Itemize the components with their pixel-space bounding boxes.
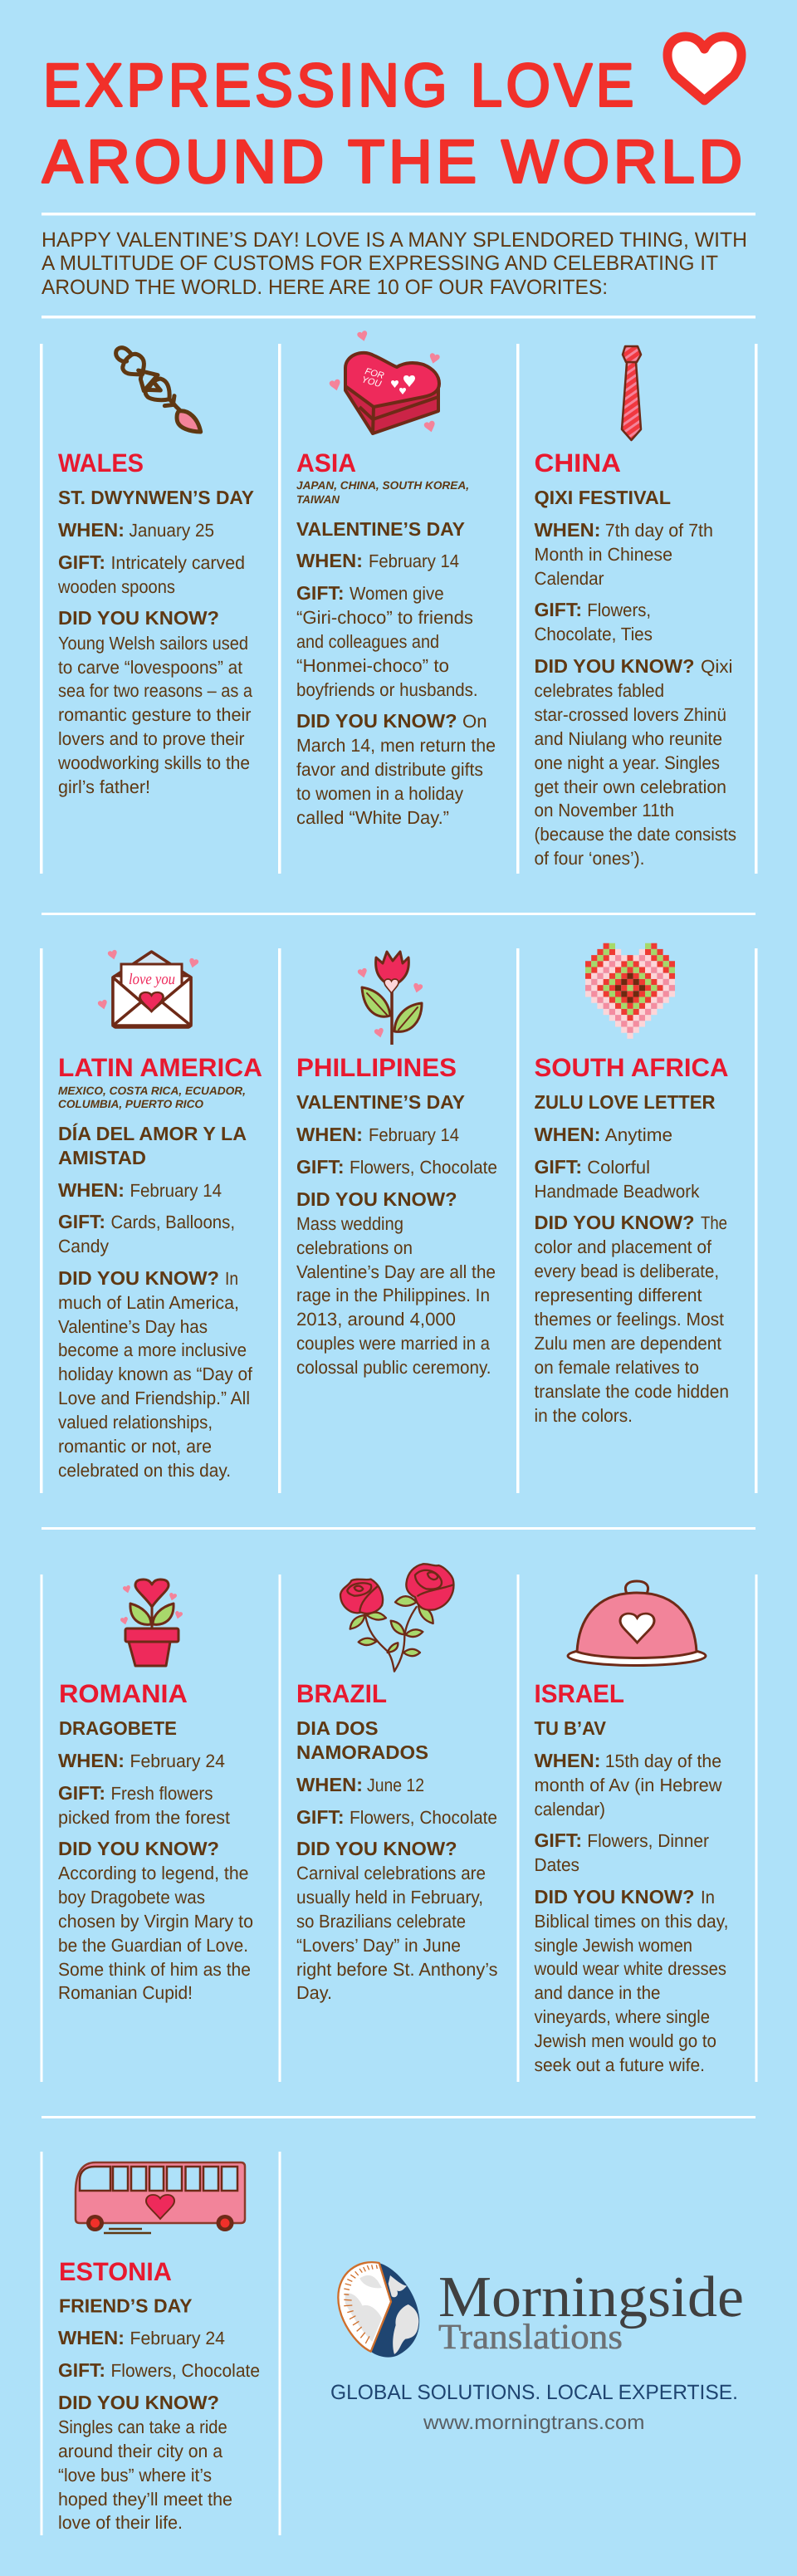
details text: The [701,1212,727,1233]
icon: rose [357,952,423,1045]
details text: February 14 [130,1180,222,1201]
details text: GIFT: [58,2359,105,2381]
details text: Anytime [605,1124,672,1145]
details text: WHEN: [296,1774,363,1795]
details text: Cards, Balloons, [111,1212,235,1232]
country list: JAPAN, CHINA, SOUTH KOREA, [296,479,469,492]
panel: Estonia [58,2162,260,2533]
details text: DID YOU KNOW? [535,1212,694,1233]
details text [58,1750,253,2003]
country heading: WALES [58,448,144,477]
details text: woodworking skills to the [57,752,250,773]
details text: Flowers, Chocolate [350,1157,497,1178]
details text: romantic or not, are [58,1436,212,1457]
details text: “Lovers’ Day” in June [296,1935,461,1956]
details text: and Niulang who reunite [535,728,722,749]
logo: Morningside Translations [338,2262,744,2358]
panel: Brazil [296,1564,498,2003]
details text: DID YOU KNOW? [58,1267,219,1289]
details text: February 24 [130,1751,225,1771]
panel: China [535,346,736,869]
holiday name: ZULU LOVE LETTER [535,1091,716,1113]
details text: girl’s father! [58,776,150,797]
details text: so Brazilians celebrate [296,1911,466,1932]
holiday name [296,1717,428,1763]
details text: and colleagues and [296,631,439,652]
details text: month of Av (in Hebrew [535,1775,722,1795]
details text [296,1774,498,2003]
country heading: PHILLIPINES [296,1053,457,1082]
details text: color and placement of [535,1237,712,1257]
details text: January 25 [130,520,214,541]
country heading: ESTONIA [59,2257,172,2286]
details text: Calendar [535,568,604,589]
details text: Some think of him as the [58,1959,251,1980]
details text: couples were married in a [296,1333,491,1354]
details text: GIFT: [535,599,582,620]
details text: DID YOU KNOW? [535,655,694,677]
details text: sea for two reasons – as a [58,680,253,701]
details text: February 14 [369,1124,459,1145]
wordmark: Morningside [438,2265,744,2329]
country heading: ROMANIA [59,1679,188,1708]
icon: serving cloche [568,1581,706,1666]
details text: “Honmei-choco” to [296,655,449,676]
holiday name: TU B’AV [535,1717,607,1739]
details text: WHEN: [58,1750,125,1771]
country heading: BRAZIL [296,1679,387,1708]
details text: DID YOU KNOW? [58,1838,219,1859]
icon: love bus [76,2162,245,2233]
details text: Candy [58,1236,109,1256]
details text: colossal public ceremony. [296,1357,491,1378]
details text: Day. [296,1982,332,2003]
details text: Intricately carved [111,552,245,573]
details text: (because the date consists [535,824,736,845]
details text: GIFT: [58,1211,105,1232]
details text: GIFT: [296,1156,345,1178]
details text: WHEN: [535,519,601,541]
details text: February 14 [369,551,459,571]
country heading: ISRAEL [535,1679,624,1708]
country heading: LATIN AMERICA [58,1053,262,1082]
details text [58,2327,260,2533]
details text: Flowers, Dinner [587,1830,709,1851]
details text: every bead is deliberate, [535,1261,719,1281]
website url: www.morningtrans.com [423,2412,644,2434]
details text: Qixi [701,656,732,677]
holiday name: NAMORADOS [296,1741,428,1763]
details text: one night a year. Singles [535,752,720,773]
details text: 7th day of 7th [605,520,713,541]
details text: 2013, around 4,000 [296,1309,456,1330]
country heading: SOUTH AFRICA [535,1053,729,1082]
holiday name: DRAGOBETE [59,1717,177,1739]
details text: “love bus” where it’s [58,2465,212,2485]
details text: Singles can take a ride [58,2417,227,2437]
details text: 15th day of the [605,1751,721,1771]
details text: Zulu men are dependent [535,1333,721,1354]
holiday name: FRIEND’S DAY [59,2295,193,2317]
icon: love letter envelope: love you [129,971,175,988]
details text: translate the code hidden [535,1381,729,1402]
intro text: AROUND THE WORLD. HERE ARE 10 OF OUR FAVORITES: [42,276,608,299]
holiday name: DIA DOS [296,1717,379,1739]
icon: heart chocolate box [329,331,440,433]
details text: GIFT: [296,1806,345,1828]
holiday name: DÍA DEL AMOR Y LA [58,1123,247,1144]
details text: much of Latin America, [58,1292,239,1313]
details text: representing different [535,1285,702,1305]
details text: GIFT: [535,1829,582,1851]
wordmark: Translations [438,2318,623,2357]
details text: vineyards, where single [535,2006,710,2027]
icon: heart flower pot [120,1579,183,1666]
details text: WHEN: [58,2327,125,2348]
details text: seek out a future wife. [535,2054,705,2075]
country heading: CHINA [535,448,621,477]
country list: TAIWAN [296,493,340,506]
details text: love of their life. [58,2512,183,2533]
holiday name: QIXI FESTIVAL [535,487,671,508]
details text: Love and Friendship.” All [58,1388,250,1408]
details text: GIFT: [58,551,105,573]
details text: valued relationships, [58,1412,213,1432]
details text: be the Guardian of Love. [58,1935,248,1956]
details text: Fresh flowers [111,1783,213,1804]
details text: in the colors. [535,1405,633,1426]
country list [58,1085,246,1110]
details text: In [225,1268,238,1289]
details text: star-crossed lovers Zhinü [535,704,726,725]
details text: Young Welsh sailors used [58,633,248,654]
details text: GIFT: [535,1156,582,1178]
details text: DID YOU KNOW? [58,607,219,629]
details text: GIFT: [58,1782,105,1804]
panel: Phillipines [296,952,497,1378]
title [42,51,746,196]
details text: WHEN: [296,550,363,571]
details text: On [462,711,487,732]
details text: Biblical times on this day, [535,1911,729,1932]
details text: WHEN: [58,1179,125,1201]
details text: boy Dragobete was [58,1887,205,1908]
details text: and dance in the [535,1982,661,2003]
details text: Month in Chinese [535,544,672,565]
details text: celebrated on this day. [58,1460,231,1481]
details text: holiday known as “Day of [58,1364,253,1384]
details text [296,550,496,828]
intro text: A MULTITUDE OF CUSTOMS FOR EXPRESSING AND CELEBRATING IT [42,252,718,275]
details text [57,519,253,797]
details text: single Jewish women [535,1935,692,1956]
details text: Chocolate, Ties [535,624,653,644]
holiday name: AMISTAD [58,1147,146,1168]
details text: romantic gesture to their [58,704,251,725]
details text: around their city on a [58,2441,223,2461]
details text: to carve “lovespoons” at [58,657,242,678]
intro text: HAPPY VALENTINE’S DAY! LOVE IS A MANY SPLENDORED THING, WITH [42,228,747,252]
holiday name: ST. DWYNWEN’S DAY [58,487,254,508]
title: AROUND THE WORLD [42,128,746,196]
details text: become a more inclusive [58,1339,247,1360]
icon: lovespoon [116,348,201,432]
details text [535,1124,729,1426]
details text: Dates [535,1854,579,1875]
icon: two roses [340,1564,453,1672]
details text: February 24 [130,2328,225,2348]
details text: right before St. Anthony’s [296,1959,498,1980]
details text [296,1124,497,1378]
details text: picked from the forest [58,1807,230,1828]
holiday name [58,1123,247,1168]
details text: Carnival celebrations are [296,1863,486,1883]
panel: South Africa [535,946,729,1426]
details text: Romanian Cupid! [58,1982,193,2003]
panel: Israel [534,1581,729,2075]
panel: Wales [57,348,254,797]
details text: Women give [350,583,444,604]
country list [296,479,469,506]
details text: favor and distribute gifts [296,759,483,780]
details text: boyfriends or husbands. [296,679,478,700]
details text: chosen by Virgin Mary to [58,1911,253,1932]
details text: “Giri-choco” to friends [296,607,473,628]
details text: WHEN: [58,519,125,541]
details text: March 14, men return the [296,735,496,756]
details text [58,1179,253,1481]
details text: Handmade Beadwork [535,1181,700,1202]
details text: DID YOU KNOW? [296,710,457,732]
tagline: GLOBAL SOLUTIONS. LOCAL EXPERTISE. [330,2381,738,2404]
details text: wooden spoons [57,576,175,597]
details text: In [701,1887,715,1908]
details text: Colorful [587,1157,650,1178]
holiday name: VALENTINE’S DAY [296,1091,465,1113]
details text: would wear white dresses [534,1958,726,1979]
details text: DID YOU KNOW? [535,1886,694,1908]
panel: Romania [58,1579,253,2003]
country heading: ASIA [296,448,356,477]
details text: June 12 [367,1775,424,1795]
details text: rage in the Philippines. In [296,1285,490,1305]
intro text [42,228,747,299]
details text: WHEN: [535,1124,601,1145]
wordmark [438,2265,744,2357]
details text: celebrations on [296,1237,413,1258]
details text: called “White Day.” [296,807,449,828]
holiday name: VALENTINE’S DAY [296,518,465,540]
details text: According to legend, the [58,1863,249,1883]
details text: Mass wedding [296,1213,403,1234]
title: EXPRESSING LOVE [43,51,638,120]
details text: themes or feelings. Most [535,1309,724,1330]
panel: Asia [296,331,496,828]
icon: love letter envelope [97,949,199,1027]
details text: calendar) [535,1799,605,1819]
details text: of four ‘ones’). [535,848,644,869]
details text: lovers and to prove their [58,728,244,749]
details text: Flowers, [587,600,651,620]
details text [535,519,736,869]
details text: usually held in February, [296,1887,483,1908]
details text: hoped they’ll meet the [58,2489,232,2510]
details text: Valentine’s Day has [58,1316,208,1337]
country list: MEXICO, COSTA RICA, ECUADOR, [58,1085,246,1097]
details text [534,1750,729,2075]
details text: Flowers, Chocolate [111,2360,260,2381]
icon: globe and compass [338,2262,419,2358]
details text: celebrates fabled [535,680,664,701]
details text: GIFT: [296,582,345,604]
details text: to women in a holiday [296,783,463,804]
icon: title heart [667,37,741,100]
details text: Jewish men would go to [535,2030,716,2051]
details text: get their own celebration [535,776,726,797]
details text: DID YOU KNOW? [296,1838,457,1859]
details text: DID YOU KNOW? [58,2392,219,2413]
icon: heart chocolate box: FOR [364,366,385,381]
icon: necktie [622,346,641,440]
details text: Valentine’s Day are all the [296,1261,496,1282]
icon: beaded heart [585,946,675,1036]
country list: COLUMBIA, PUERTO RICO [58,1098,203,1110]
details text: DID YOU KNOW? [296,1188,457,1210]
panel: Latin America [58,949,262,1481]
details text: on female relatives to [535,1357,699,1378]
details text: on November 11th [535,800,674,820]
details text: WHEN: [296,1124,363,1145]
icon: heart chocolate box: YOU [360,375,382,389]
details text: WHEN: [535,1750,601,1771]
details text: Flowers, Chocolate [350,1807,497,1828]
